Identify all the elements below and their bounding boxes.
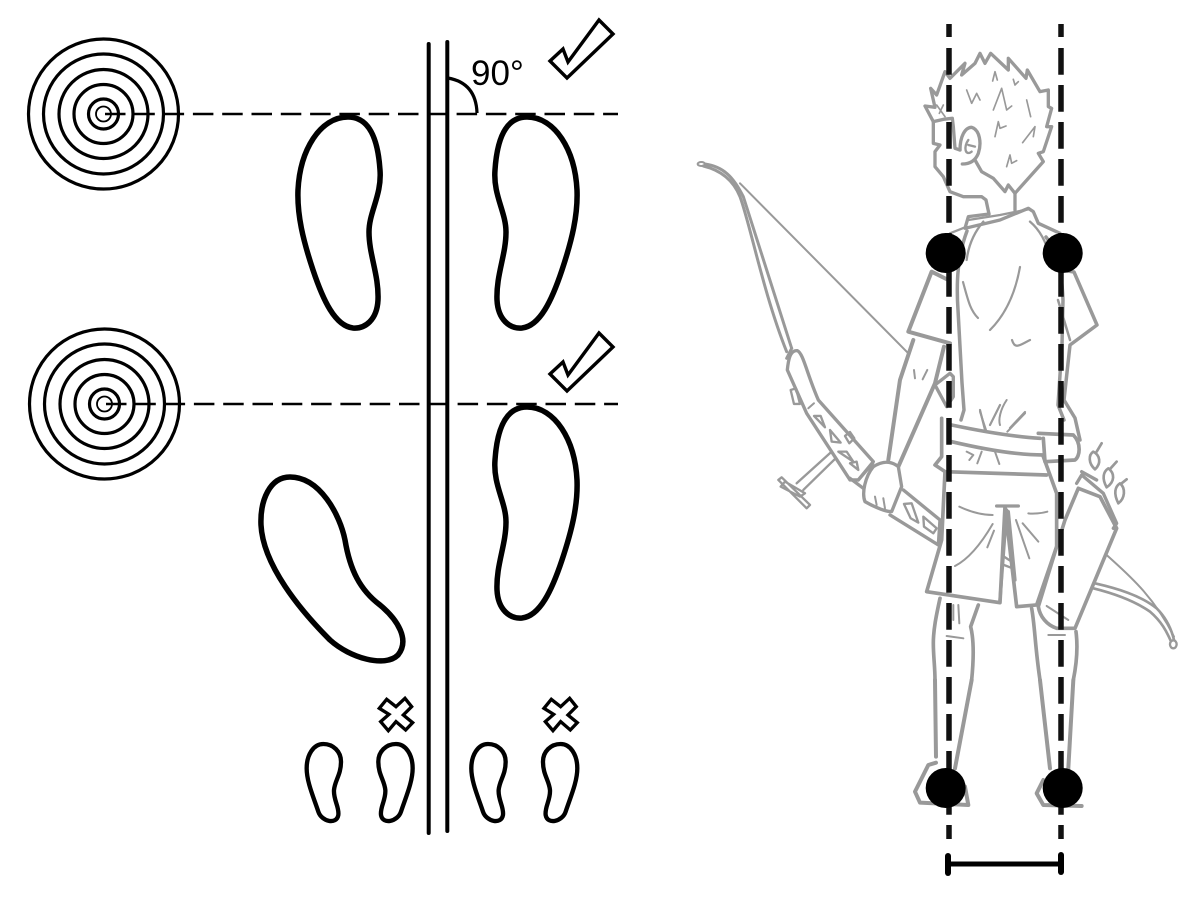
right angle arc [448, 78, 477, 113]
shoulder marker: left [926, 233, 966, 273]
panel: foot placement diagram [28, 20, 618, 833]
lower legs and feet [915, 680, 1082, 806]
alignment lines: right [1058, 24, 1064, 839]
target: bottom [30, 329, 180, 479]
lower riser [890, 490, 940, 545]
bow lower limb [1095, 583, 1174, 640]
foot: top right [495, 117, 577, 328]
target: top [28, 39, 178, 189]
check mark: bottom [550, 333, 613, 391]
torso [957, 231, 1097, 440]
shooting line: double vertical [429, 42, 447, 833]
arm and hand [888, 340, 913, 460]
foot: bottom right [495, 407, 577, 618]
bow upper limb and string [698, 162, 953, 545]
foot marker: left [926, 768, 966, 808]
foot marker: right [1043, 768, 1083, 808]
bow riser [787, 351, 873, 480]
arrows [1090, 443, 1127, 503]
width bracket: shoulder-width stance [948, 855, 1061, 873]
quiver [1038, 488, 1117, 628]
panel: archer figure [698, 53, 1177, 806]
shoulder marker: right [1043, 233, 1083, 273]
foot: angled left [261, 477, 403, 661]
check mark: top [550, 20, 613, 78]
small wrong-stance feet and crosses [307, 698, 577, 821]
dashed aiming line: bottom [106, 403, 618, 405]
sleeve [908, 272, 950, 343]
stabilizer [797, 452, 836, 490]
dashed aiming line: top [105, 113, 618, 115]
upper legs [933, 598, 940, 680]
label: 90 degrees: 90° [471, 54, 524, 93]
alignment lines: left [946, 24, 952, 839]
foot: top left [298, 117, 380, 328]
head and hair [925, 53, 1060, 260]
belt, shorts and quiver [927, 400, 1177, 680]
